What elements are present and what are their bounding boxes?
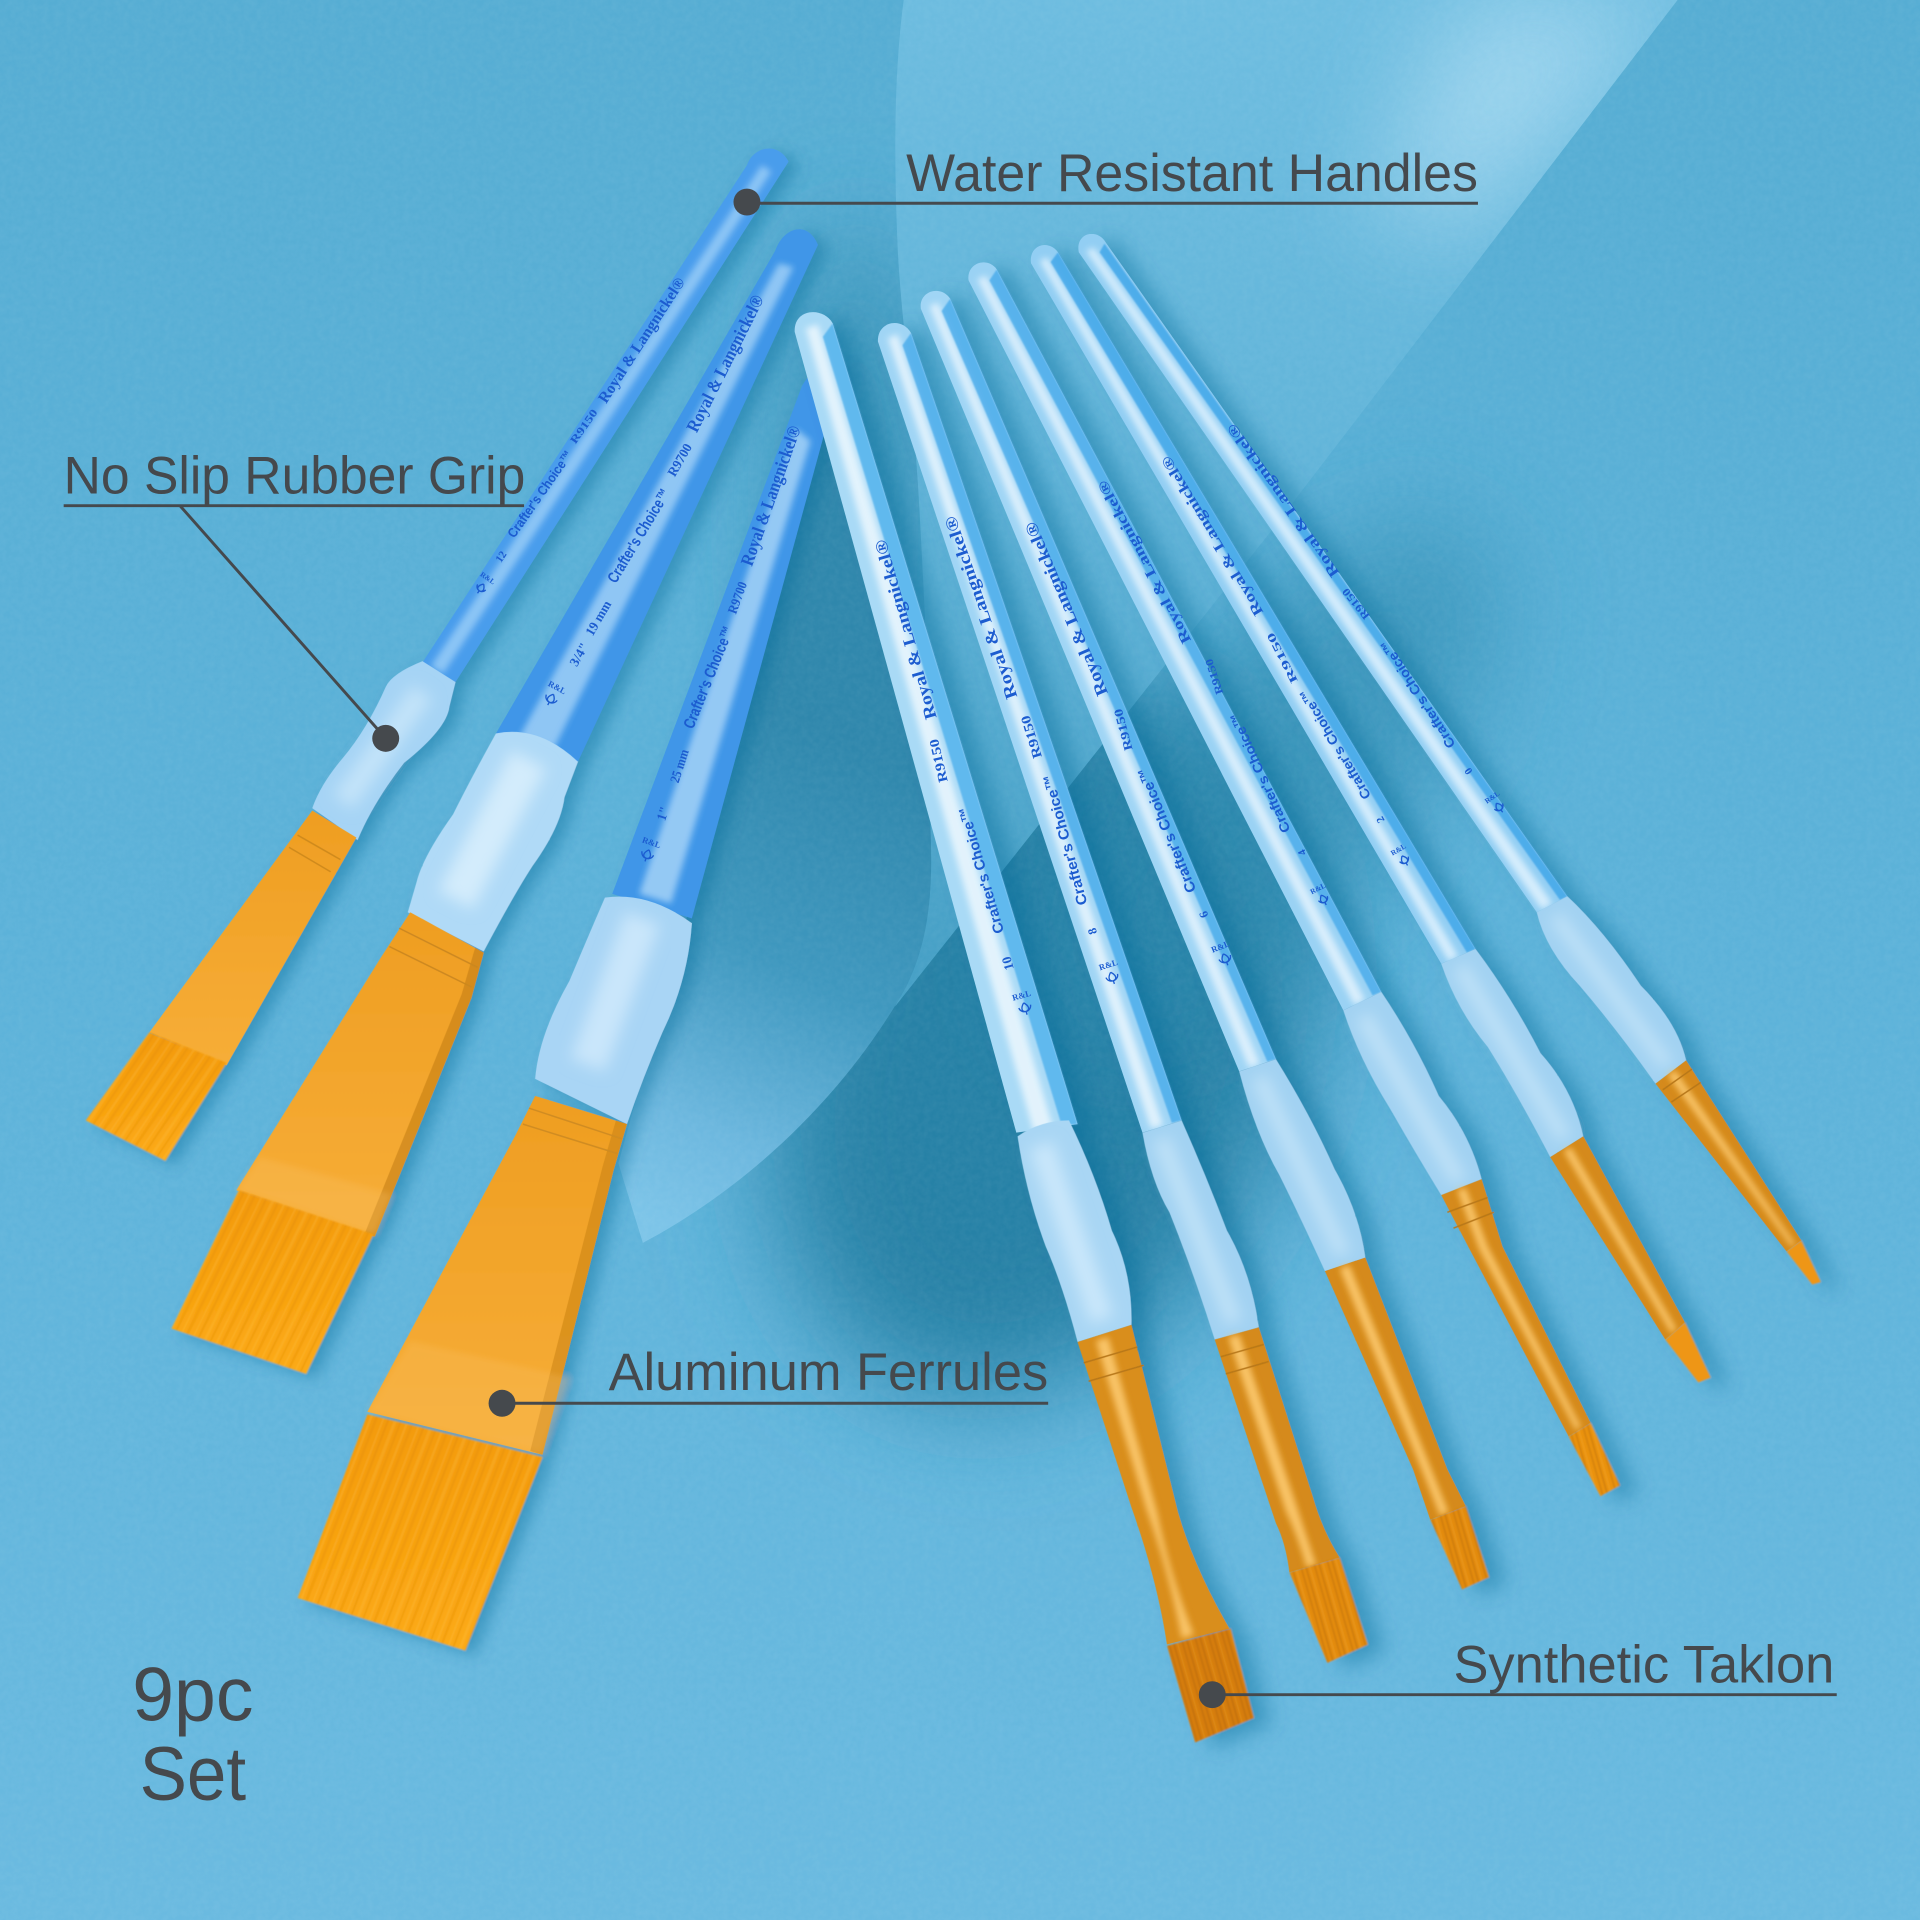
ferrule [236, 912, 484, 1237]
handle [612, 364, 842, 918]
imprint [471, 275, 689, 598]
set size label [132, 1652, 253, 1817]
bristles [1665, 1322, 1711, 1382]
bristles [1569, 1423, 1620, 1496]
imprint: Crafter's Choice™ [1135, 765, 1200, 895]
ferrule [1325, 1258, 1466, 1520]
ferrule [1550, 1136, 1685, 1340]
imprint: R&L [546, 678, 568, 696]
imprint [871, 537, 1036, 1017]
bristles [1787, 1240, 1821, 1284]
imprint [539, 291, 768, 710]
imprint: Crafter's Choice™ [605, 486, 674, 586]
imprint: R9150 [1111, 707, 1136, 752]
ferrule [1656, 1060, 1801, 1251]
imprint [1159, 453, 1415, 870]
brush 6: no 6 [921, 291, 1489, 1589]
brush 8: no 2 [1031, 245, 1711, 1382]
brush 5: no 8 [878, 323, 1368, 1663]
imprint: Crafter's Choice™ [1377, 637, 1458, 751]
imprint: R9150 [926, 737, 951, 784]
imprint: R9700 [664, 441, 695, 479]
imprint: R9700 [725, 579, 750, 616]
grip [1343, 992, 1482, 1195]
bristles [1289, 1558, 1368, 1663]
imprint: Crafter's Choice™ [1296, 686, 1374, 802]
imprint [1095, 477, 1334, 909]
handle [795, 312, 1078, 1133]
imprint: 3/4" [566, 640, 592, 669]
ferrule [1215, 1327, 1340, 1572]
imprint: 25 mm [667, 747, 692, 785]
ferrule [367, 1096, 627, 1455]
imprint: Crafter's Choice™ [956, 805, 1008, 935]
imprint: R&L [1210, 938, 1231, 955]
imprint [636, 423, 805, 865]
imprint [1021, 519, 1237, 969]
imprint: R9150 [1265, 630, 1301, 685]
imprint: 4 [1296, 847, 1309, 857]
imprint: Crafter's Choice™ [504, 448, 576, 540]
set size label: 9pc [132, 1652, 253, 1737]
grip [535, 897, 692, 1124]
grip [1239, 1059, 1365, 1271]
brush 2: 3/4 inch flat [171, 229, 818, 1374]
curled paper leaf [618, 429, 931, 1243]
bristles [1167, 1629, 1254, 1742]
bristles [171, 1190, 373, 1374]
callout: aluminum ferrules: Aluminum Ferrules [609, 1343, 1048, 1402]
callout: synthetic taklon: Synthetic Taklon [1453, 1635, 1834, 1694]
imprint: R&L [479, 570, 497, 586]
handle [496, 229, 818, 762]
callout: aluminum ferrules [489, 1343, 1048, 1417]
handle [921, 291, 1276, 1071]
brush 4: no 10 [795, 312, 1254, 1742]
imprint: R&L [1389, 841, 1408, 857]
imprint: 0 [1462, 765, 1476, 777]
imprint: 6 [1196, 909, 1211, 920]
imprint: R9150 [1018, 713, 1045, 760]
brush 9: no 0 [1078, 234, 1821, 1284]
imprint: Royal & Langnickel® [941, 513, 1021, 702]
brush 1: no 12 flat [86, 149, 789, 1161]
imprint: R&L [1483, 789, 1501, 806]
imprint: Royal & Langnickel® [737, 423, 805, 568]
imprint: Crafter's Choice™ [681, 624, 738, 731]
imprint: Royal & Langnickel® [1021, 519, 1112, 699]
imprint: R&L [1098, 957, 1119, 972]
handle [878, 323, 1182, 1133]
set size label: Set [140, 1732, 246, 1817]
imprint: Royal & Langnickel® [871, 537, 941, 722]
handle [422, 149, 789, 682]
imprint: Royal & Langnickel® [682, 291, 768, 435]
handle [1031, 245, 1476, 964]
handle [968, 262, 1381, 1010]
imprint [941, 513, 1124, 987]
callout: no slip rubber grip: No Slip Rubber Grip [64, 446, 525, 505]
callout: water resistant handles [733, 144, 1478, 216]
imprint: Crafter's Choice™ [1227, 710, 1293, 835]
bristles [86, 1032, 227, 1161]
imprint: R9150 [568, 407, 601, 446]
grip [408, 732, 578, 951]
imprint: 8 [1085, 926, 1100, 936]
ferrule [1078, 1325, 1229, 1644]
grip [1018, 1120, 1131, 1342]
bristles [298, 1414, 542, 1651]
ferrule [149, 811, 356, 1065]
imprint: Royal & Langnickel® [1159, 453, 1267, 618]
brush 7: no 4 [968, 262, 1620, 1496]
imprint: Crafter's Choice™ [1041, 773, 1091, 907]
imprint: R9150 [1203, 657, 1226, 696]
imprint: R&L [641, 835, 662, 850]
callout: no slip rubber grip [64, 446, 525, 752]
grip [1441, 949, 1583, 1157]
bristles [1430, 1506, 1489, 1589]
imprint: 10 [999, 955, 1017, 972]
grip [312, 661, 456, 840]
imprint: 12 [493, 549, 510, 565]
ferrule [1441, 1179, 1591, 1436]
callout: synthetic taklon [1199, 1635, 1837, 1708]
imprint [1224, 420, 1509, 817]
imprint: R&L [1309, 881, 1327, 896]
callout: water resistant handles: Water Resistant Handles [906, 144, 1478, 203]
imprint: 19 mm [582, 598, 614, 638]
imprint: Royal & Langnickel® [595, 275, 689, 406]
imprint: 1" [653, 804, 672, 823]
handle [1078, 234, 1567, 912]
brush 3: 1 inch flat [298, 364, 842, 1651]
imprint: R&L [1011, 988, 1032, 1003]
imprint: 2 [1374, 814, 1387, 825]
grip [1537, 896, 1686, 1084]
imprint: Royal & Langnickel® [1095, 477, 1195, 646]
imprint: R9150 [1340, 585, 1373, 622]
grip [1142, 1120, 1259, 1340]
imprint: Royal & Langnickel® [1224, 420, 1343, 580]
folded paper sheet [895, 0, 1678, 1007]
